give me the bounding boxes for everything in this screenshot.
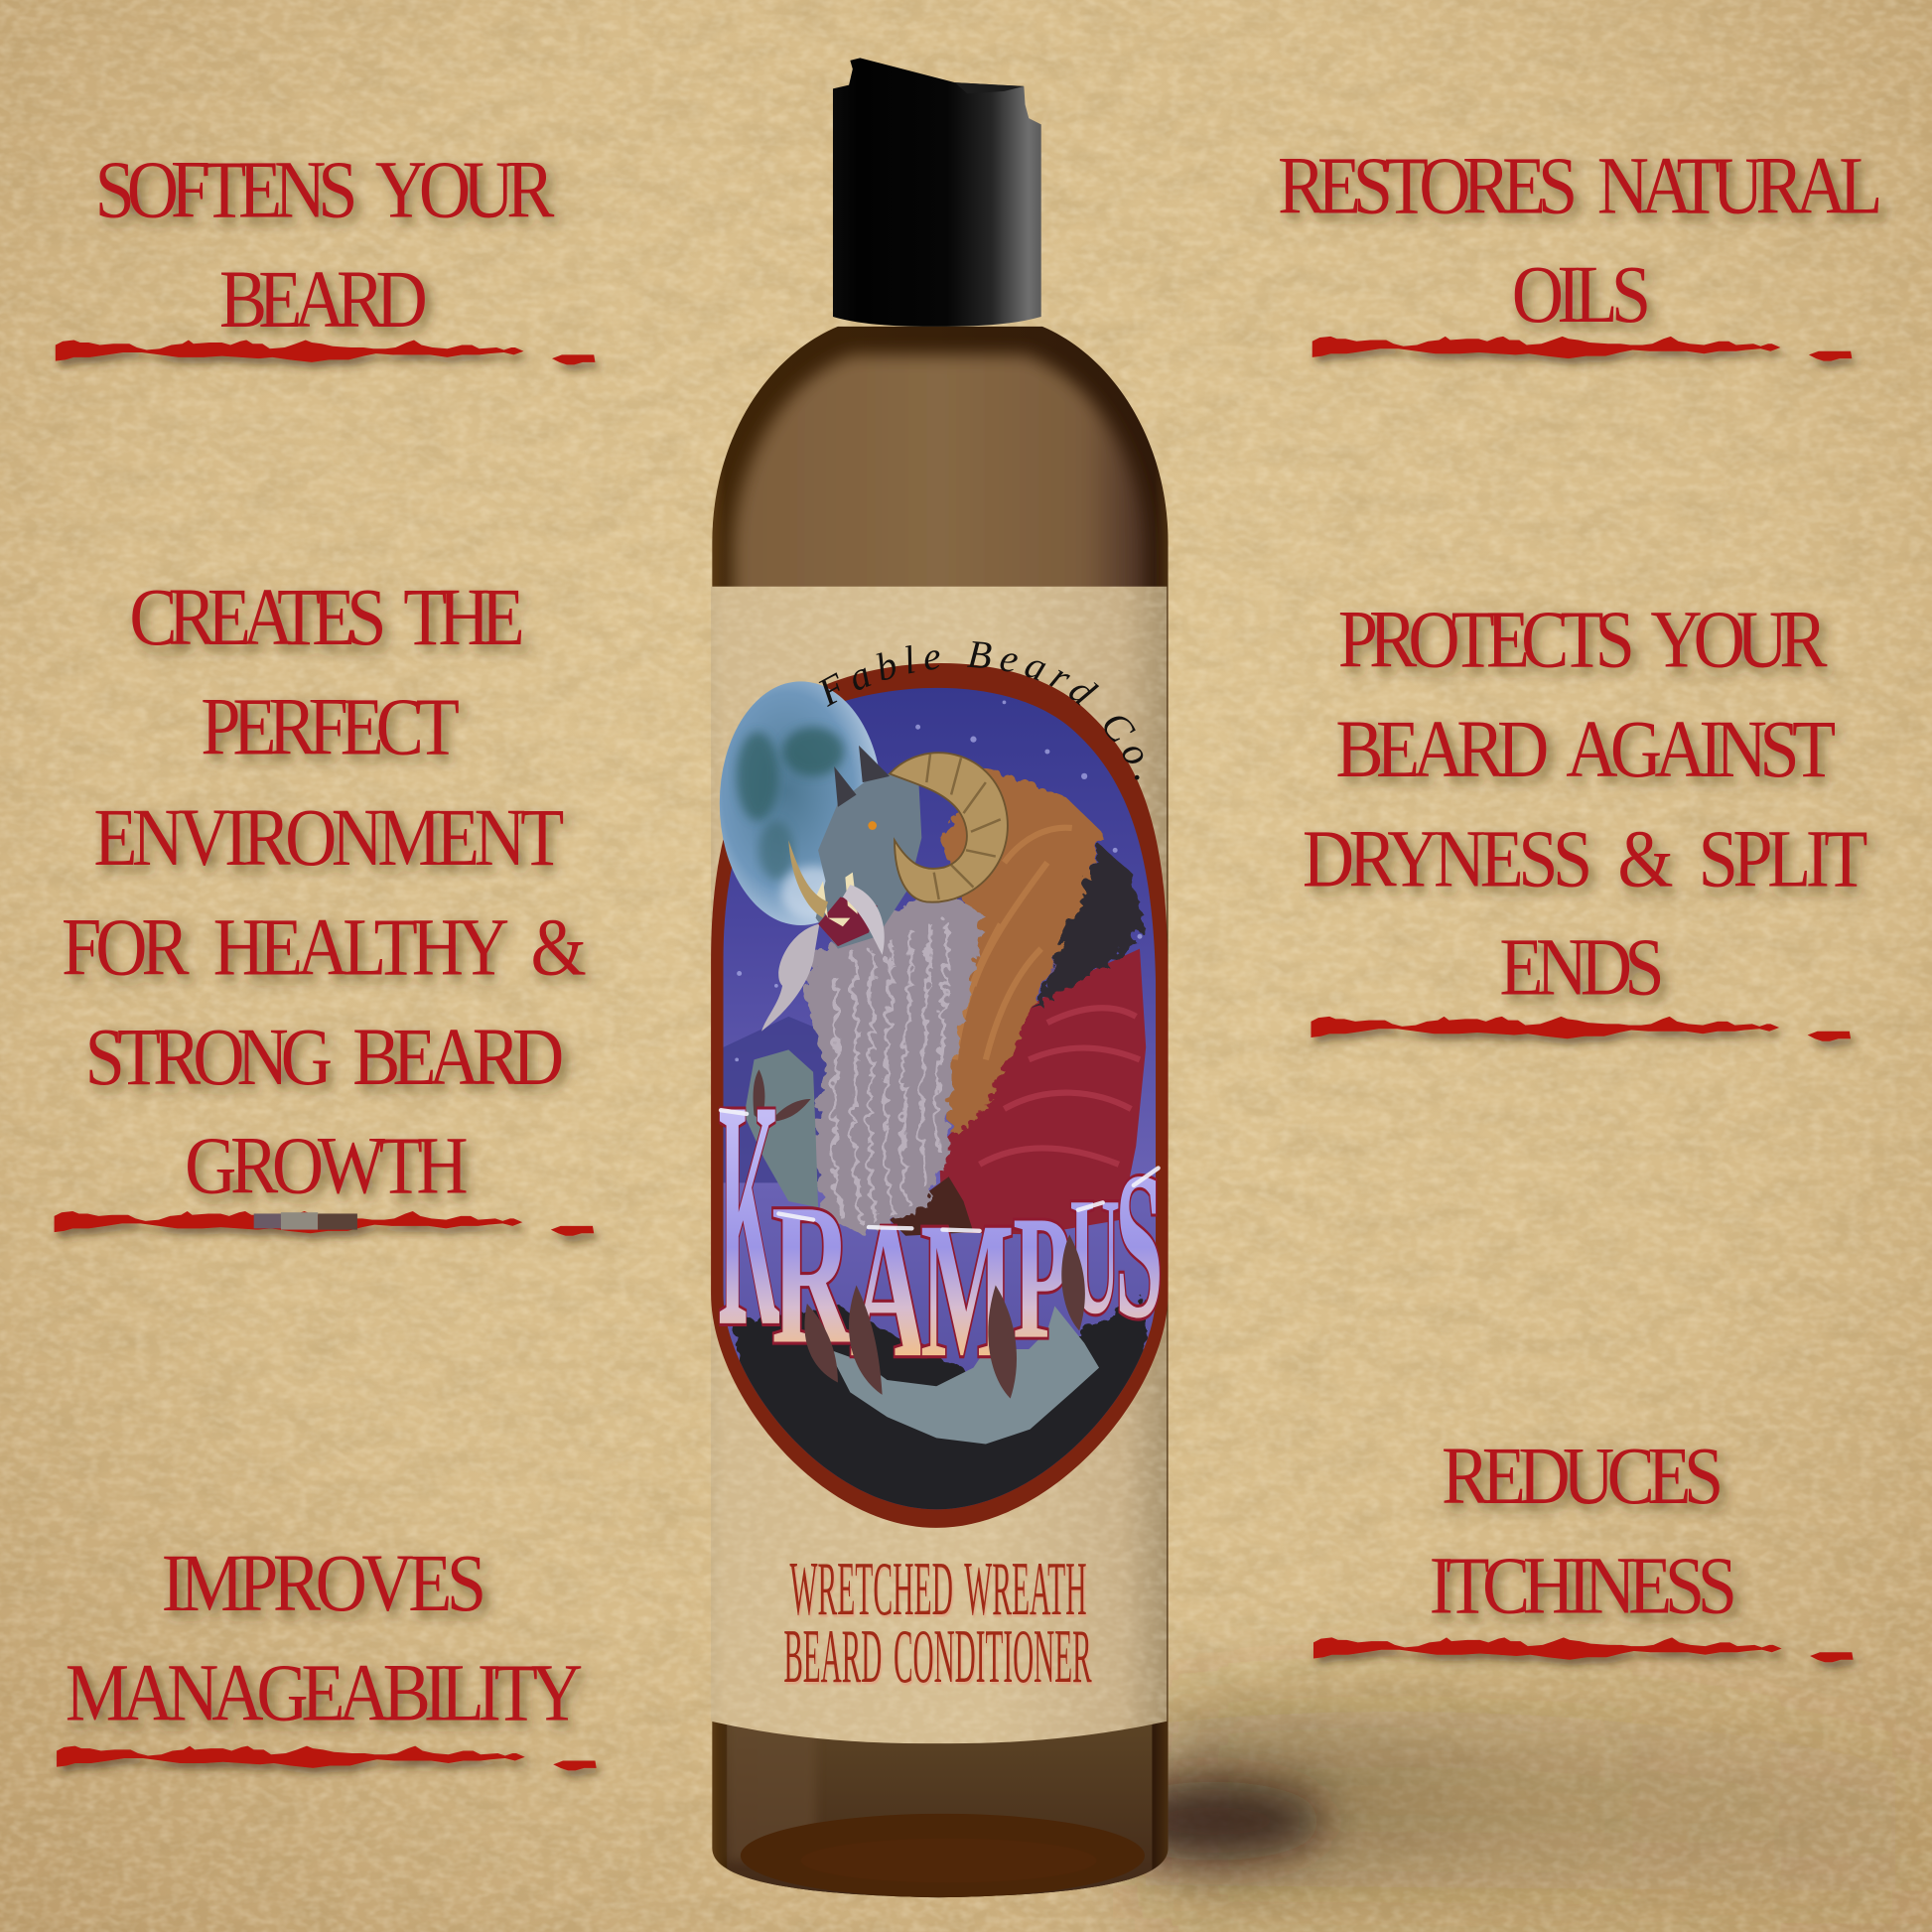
left benefit: improves manageability: MANAGEABILITY [66,1647,583,1738]
fable beard co script: Fable Beard Co. [818,641,1144,780]
night sky [711,665,1169,1528]
torn red rule [1311,1017,1851,1041]
torn red rule [1313,1637,1854,1662]
torn red rule [56,341,595,364]
curled ram horn [890,753,1008,902]
torn red rule [1312,337,1852,361]
coat [939,949,1146,1235]
text: BEARD CONDITIONER [783,1613,1092,1699]
claws [804,1235,1085,1399]
beard wisp [761,924,819,1032]
krampus title: U [1069,1164,1120,1349]
krampus title: A [850,1182,926,1398]
snowflakes [735,701,1142,1087]
label [711,586,1169,1743]
moon [720,681,883,925]
mouth and teeth [818,897,878,946]
belt [890,1176,973,1236]
krampus title [719,1034,1164,1398]
small dark horns [834,746,890,807]
krampus title: R [771,1164,854,1387]
bottle body [712,327,1169,1922]
tusk [788,840,828,918]
right benefit: reduces itchiness [1430,1430,1737,1631]
krampus title: M [920,1182,1014,1398]
product bottle [711,58,1169,1898]
distant mountains [723,1017,827,1183]
left benefit: improves manageability: IMPROVES [162,1537,486,1628]
dispenser cap [833,58,1041,327]
lower hand [828,1307,1099,1445]
left benefit: softens your beard: SOFTENS YOUR [95,144,554,235]
label: S [1115,1128,1164,1361]
left benefit: softens your beard: BEARD [219,253,428,345]
right benefit: restores natural oils: OILS [1512,248,1651,340]
left benefit: perfect environment: ENVIRONMENT [93,792,564,883]
krampus title: K [719,1034,780,1395]
right benefit: protects your beard [1303,594,1867,1013]
left benefit: improves manageability [66,1537,583,1738]
label: WRETCHED WREATH [790,1546,1087,1631]
white moustache [843,885,885,955]
right benefit: protects your beard: PROTECTS YOUR [1338,594,1827,685]
left benefit: perfect environment: GROWTH [185,1120,469,1210]
left benefit: perfect environment: STRONG BEARD [85,1012,564,1102]
oval frame [711,663,1169,1528]
right benefit: restores natural oils [1278,140,1882,340]
left benefit: perfect environment: CREATES THE [129,571,525,662]
label illustration [711,641,1169,1528]
left benefit: perfect environment [62,571,587,1210]
dark fur collar [1029,842,1141,1007]
right benefit: restores natural oils: RESTORES NATURAL [1278,140,1882,231]
right benefit: reduces itchiness: REDUCES [1442,1430,1724,1521]
right benefit: protects your beard: DRYNESS & SPLIT [1303,813,1867,903]
snow caps on title [721,1110,1159,1231]
black fur lower [730,1294,1146,1528]
torn red rule [57,1746,597,1770]
left benefit: perfect environment: FOR HEALTHY & [62,901,587,993]
head [816,766,921,949]
grey beard [798,888,981,1232]
eye [868,821,877,830]
left benefit: perfect environment: PERFECT [201,681,460,772]
product name [783,1546,1092,1699]
krampus title: P [1013,1179,1070,1376]
bottle cast shadow [1103,1712,1932,1891]
torn red rule with patch [55,1211,594,1236]
left benefit: softens your beard [95,144,554,345]
left hand [745,1049,818,1207]
brown fur mantle [934,765,1099,1133]
right benefit: protects your beard: BEARD AGAINST [1335,703,1836,794]
krampus figure [745,746,1099,1445]
right benefit: protects your beard: ENDS [1499,921,1665,1013]
right benefit: reduces itchiness: ITCHINESS [1430,1540,1737,1631]
